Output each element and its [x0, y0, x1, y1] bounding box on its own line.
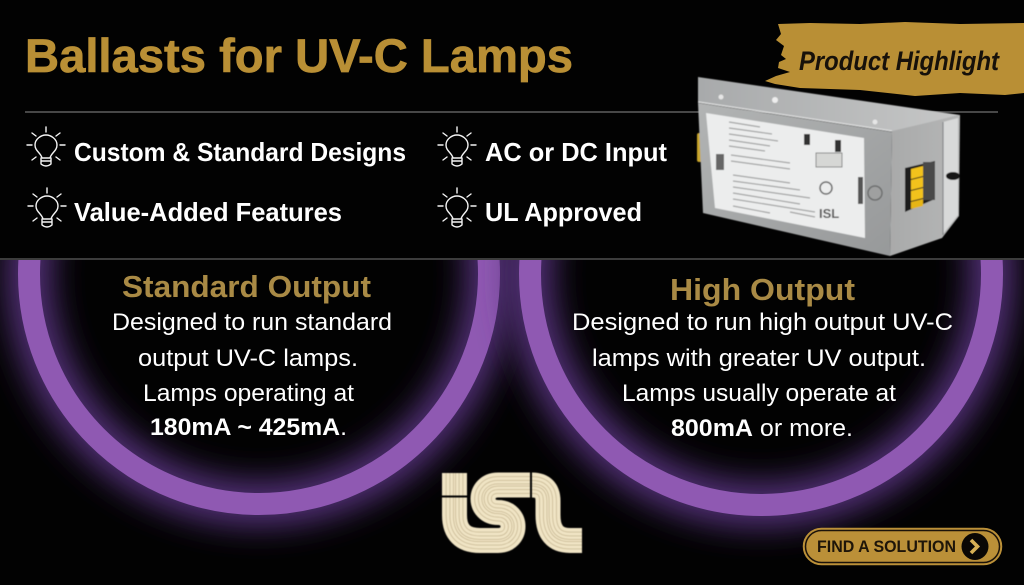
ring glow: [492, 260, 1024, 549]
heading: High Output: [670, 272, 855, 307]
letters i and s: [454, 485, 530, 540]
banner: product highlight: [765, 22, 1024, 96]
feature: UL approved: UL Approved: [485, 197, 642, 227]
front screw: [868, 186, 882, 200]
body text: Designed to run high output UV-C: [572, 309, 953, 336]
button label: FIND A SOLUTION: [817, 537, 956, 556]
body text: Designed to run standard: [112, 309, 392, 336]
product photo: ballast: ISL: [819, 206, 839, 221]
feature: AC or DC input: AC or DC Input: [485, 137, 667, 167]
icon: light bulb value-added: [28, 188, 66, 227]
logo: ISL: [454, 473, 582, 540]
feature: value-added features: Value-Added Features: [74, 197, 342, 227]
white label: [706, 113, 865, 238]
letter l: [532, 485, 582, 540]
button pill: [804, 528, 1002, 564]
body text: 180mA ~ 425mA .: [150, 414, 347, 441]
side panel: [890, 115, 960, 256]
purple ring: [519, 260, 1003, 516]
feature: custom and standard designs: Custom & Standard Designs: [74, 137, 406, 167]
UL mark: [820, 182, 832, 194]
ring glow: [0, 260, 520, 548]
brush stroke shape: [765, 22, 1024, 96]
side notch: [946, 172, 960, 180]
title: Ballasts for UV-C Lamps: [25, 29, 573, 82]
feature list: [27, 127, 667, 227]
left connector: [697, 133, 703, 162]
top flange: [698, 77, 960, 131]
icon: chevron circle: [962, 533, 988, 560]
label print: [729, 122, 815, 217]
button: find a solution: [804, 528, 1002, 564]
body text: Lamps usually operate at: [622, 380, 896, 407]
icon: light bulb custom designs: [27, 127, 65, 166]
body text: output UV-C lamps.: [138, 345, 358, 372]
heading: Standard Output: [122, 269, 371, 304]
purple ring: [18, 260, 500, 515]
banner text: Product Highlight: [799, 46, 1000, 76]
panel: high output: [492, 260, 1024, 549]
front face: [698, 103, 892, 256]
panel: standard output: [0, 260, 520, 548]
product photo: ballast: [697, 77, 960, 256]
terminal block: [905, 161, 935, 212]
letter i dot: [442, 473, 467, 496]
body text: [112, 309, 392, 441]
body text: 800mA or more.: [671, 415, 853, 442]
body text: lamps with greater UV output.: [592, 345, 926, 372]
icon: light bulb UL: [438, 188, 476, 227]
body text: Lamps operating at: [143, 380, 354, 407]
icon: light bulb input: [438, 127, 476, 166]
body text: [572, 309, 953, 442]
